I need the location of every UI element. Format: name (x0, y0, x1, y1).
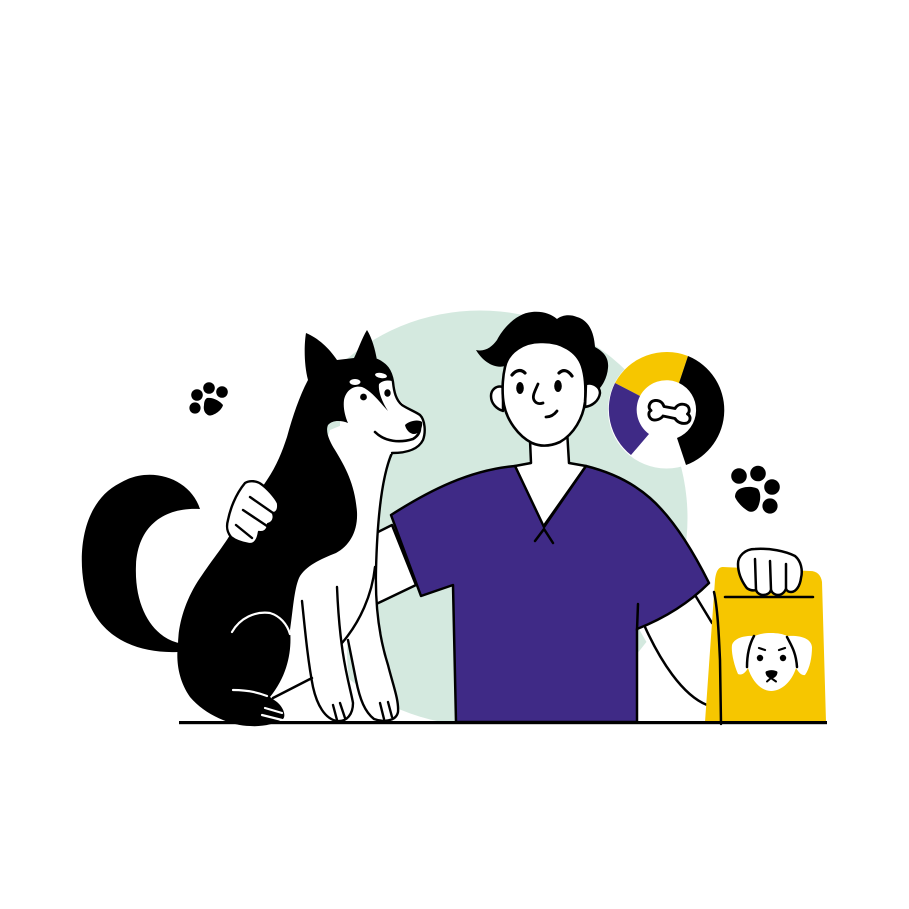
donut backing disc (608, 352, 725, 468)
dog white body and front legs (284, 423, 398, 721)
segment: black (677, 356, 724, 465)
ground line (179, 721, 827, 724)
background circle (327, 310, 688, 721)
dog tail (82, 475, 200, 652)
icon: bone (649, 400, 690, 423)
paw print: large (731, 466, 780, 514)
dog mouth (375, 428, 420, 441)
segment: purple (609, 383, 649, 455)
vet hand on bag (738, 549, 802, 595)
bag fold lines (714, 592, 813, 724)
dog eyes (360, 389, 391, 400)
vet shirt (391, 466, 709, 722)
vet ears (491, 384, 600, 411)
shirt collar cross (535, 529, 638, 630)
vet face (503, 342, 585, 446)
dog haunch and foot details (232, 613, 290, 720)
illustration: vet with dog (82, 310, 827, 726)
vet hand on dog back (227, 481, 278, 544)
vet nose and smile (533, 384, 557, 417)
vet eyes and eyebrows (512, 371, 572, 394)
segment: yellow (615, 352, 688, 396)
dog eyebrows (350, 372, 387, 385)
dog nose (405, 421, 422, 434)
dog black body and ears (177, 330, 392, 726)
vet neck (515, 430, 586, 527)
vet left arm behind dog (372, 525, 416, 606)
dog face on bag (732, 633, 812, 691)
food bag (705, 549, 826, 724)
dog head outline (377, 360, 425, 453)
vet right arm (637, 592, 716, 708)
donut chart (608, 352, 725, 468)
vet hair (476, 312, 608, 398)
bag body (705, 567, 826, 722)
dog (82, 330, 425, 726)
dog leg outlines (273, 453, 398, 721)
dog head (340, 360, 425, 462)
paw print: small (189, 382, 228, 416)
